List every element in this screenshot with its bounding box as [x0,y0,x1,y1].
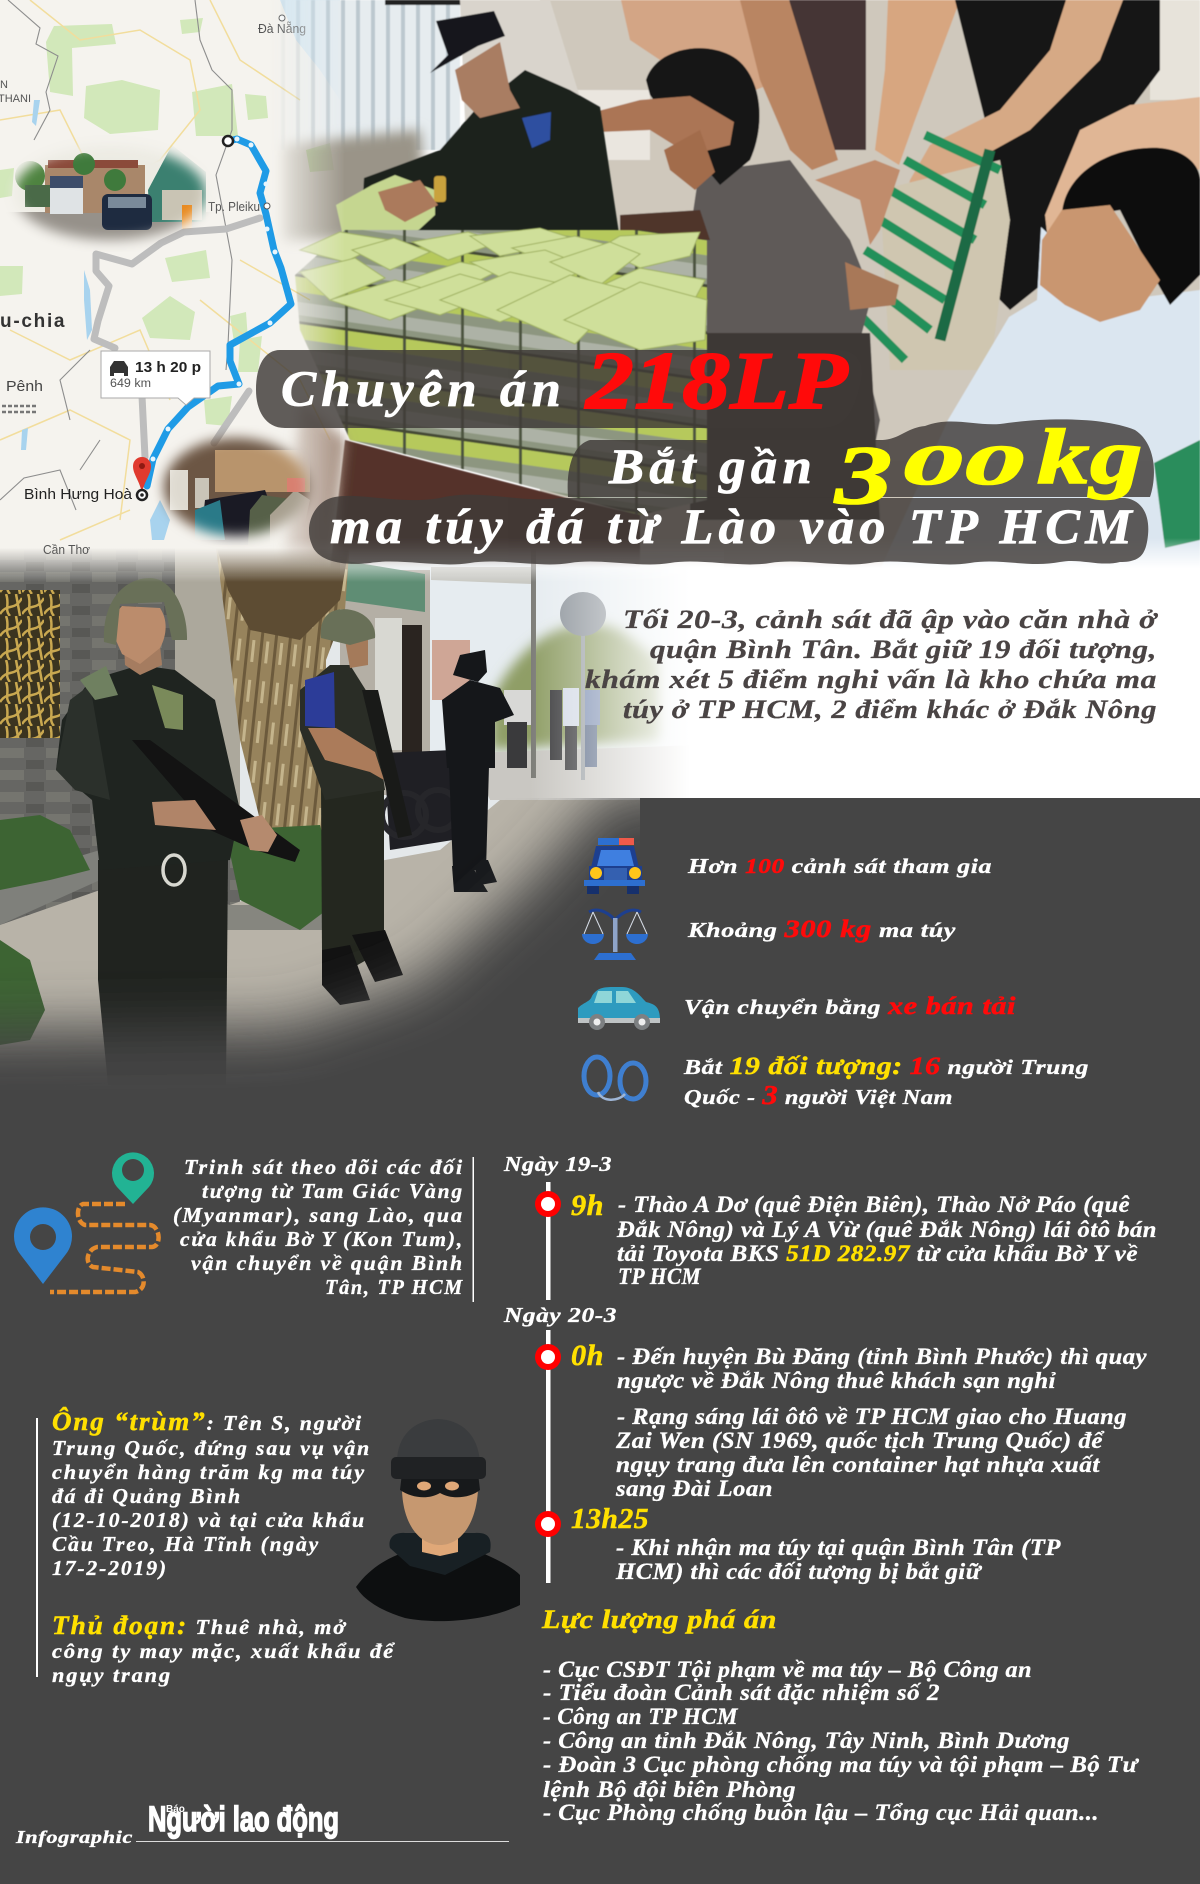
title: Bắt gần [608,438,817,494]
time: 0h: 0h [571,1339,604,1372]
intro text block [585,605,1159,724]
title: kg [1037,413,1143,500]
text: the ringleader and method: ngụy trang [52,1663,172,1687]
list: forces: lệnh Bộ đội biên Phòng [543,1777,796,1802]
text: surveillance route [173,1155,474,1302]
text: the ringleader and method: (12-10-2018) và tại cửa khẩu [52,1508,366,1532]
second officer [300,609,412,1005]
man in light-blue shirt [880,227,1200,570]
motorbike [384,750,453,850]
entry: 20-3 at 0h: - Đến huyện Bù Đăng (tỉnh Bình Phước) thì quay [617,1344,1147,1369]
officer in black on the phone [442,650,514,892]
entry: 20-3 at 0h: sang Đài Loan [615,1476,773,1501]
entry: 20-3 at 0h [615,1344,1147,1501]
stat: suspects [683,1053,1089,1110]
icon: car [578,987,660,1030]
heading: forces: Lực lượng phá án [541,1605,777,1634]
text: the ringleader and method: công ty may mặc, xuất khẩu để [52,1639,395,1663]
text: the ringleader and method: Trung Quốc, đứng sau vụ vận [52,1436,371,1460]
photo: arrest scene [540,0,1200,570]
entry: 20-3 at 13h25: HCM) thì các đối tượng bị bắt giữ [615,1559,983,1584]
route start marker [223,136,233,146]
blue main route [147,139,291,486]
text: the ringleader and method: Thủ đoạn: Thuê nhà, mở [52,1611,347,1640]
icon: masked ringleader [356,1419,520,1621]
title: 00 [902,435,1025,497]
entry: 20-3 at 13h25: - Khi nhận ma túy tại quận Bình Tân (TP [616,1535,1061,1560]
map labels: Bình Hưng Hoà [24,487,133,503]
list: forces [543,1657,1140,1825]
title: ma túy đá từ Lào vào TP HCM [330,498,1137,554]
list: forces: - Đoàn 3 Cục phòng chống ma túy và tội phạm – Bộ Tư [543,1752,1140,1777]
credit: infographic and newspaper logo [15,1800,509,1847]
stat: police officers: Hơn 100 cảnh sát tham gia [687,854,992,878]
title: Chuyên án [281,362,566,418]
marker: 0h [535,1344,561,1370]
street background [430,560,700,800]
photo inset: border gate with trucks [10,142,213,248]
credit: infographic and newspaper logo: Người lao động [148,1800,339,1839]
stat: vehicle: Vận chuyển bằng xe bán tải [684,993,1016,1020]
palm trunk [217,552,348,830]
date: 20-3: Ngày 20-3 [503,1303,617,1327]
text: surveillance route: tượng từ Tam Giác Vàng [202,1179,464,1203]
map labels: Tp. Pleiku [208,200,260,214]
text: surveillance route: (Myanmar), sang Lào, qua [173,1203,464,1227]
intro text block: quận Bình Tân. Bắt giữ 19 đối tượng, [650,635,1157,664]
sea on the right of the map [280,0,340,100]
list: forces: - Cục CSĐT Tội phạm về ma túy – Bộ Công an [543,1657,1032,1682]
stat: drug weight: Khoảng 300 kg ma túy [687,916,956,943]
plants [0,815,340,1045]
timeline [503,1152,1157,1584]
list: forces: - Công an tỉnh Đắk Nông, Tây Ninh, Bình Dương [543,1728,1070,1753]
text: the ringleader and method: Ông “trùm” : Tên S, người [52,1407,363,1436]
text: surveillance route: Tân, TP HCM [325,1275,464,1299]
map labels [0,15,306,557]
text: the ringleader and method: 17-2-2019) [52,1556,168,1580]
photo: police officer [270,0,620,250]
text: the ringleader and method: đá đi Quảng Bình [52,1484,242,1508]
entry: 19-3 at 9h: TP HCM [618,1264,702,1289]
map labels: u-chia [0,311,65,332]
icon: police car [584,838,645,894]
top photo collage: arrest, police officer and drug bales [270,0,1200,570]
time: 13h25: 13h25 [571,1504,649,1535]
travel time callout [101,351,210,405]
entry: 19-3 at 9h: Đắk Nông) và Lý A Vừ (quê Đắk Nông) lái ôtô bán [616,1217,1157,1242]
alternative grey routes [94,218,260,457]
title: 218LP [585,335,848,426]
marker: 13h25 [535,1511,561,1537]
credit: infographic and newspaper logo: Infographic [15,1827,133,1847]
text: the ringleader and method: Cầu Treo, Hà Tĩnh (ngày [52,1532,320,1556]
credit: infographic and newspaper logo: Báo [166,1804,185,1815]
stat: suspects: Bắt 19 đối tượng: 16 người Trung [683,1053,1089,1080]
entry: 19-3 at 9h: - Thào A Dơ (quê Điện Biên), Thào Nở Páo (quê [618,1192,1130,1217]
list: forces: - Tiểu đoàn Cảnh sát đặc nhiệm số 2 [543,1680,940,1705]
house and wall [0,540,240,940]
entry: 19-3 at 9h: tải Toyota BKS 51D 282.97 từ cửa khẩu Bờ Y về [617,1241,1138,1266]
entry: 19-3 at 9h [616,1192,1157,1289]
list: forces: - Công an TP HCM [543,1704,739,1729]
intro text block: khám xét 5 điểm nghi vấn là kho chứa ma [585,665,1157,694]
map: route from Bờ Y to Bình Hưng Hoà [0,0,340,575]
entry: 20-3 at 0h: Zai Wen (SN 1969, quốc tịch Trung Quốc) để [615,1428,1104,1453]
intro text block: Tối 20-3, cảnh sát đã ập vào căn nhà ở [623,605,1159,634]
entry: 20-3 at 0h: ngụy trang đưa lên container hạt nhựa xuất [616,1452,1100,1477]
travel time callout: 13 h 20 p [135,359,201,376]
photo inset: warehouse search [154,428,316,546]
map labels: Đà Nẵng [258,21,306,36]
dark background section [0,790,1200,1884]
icon: route pins [14,1152,159,1292]
entry: 20-3 at 0h: ngược về Đắk Nông thuê khách sạn nghỉ [617,1368,1056,1393]
map labels: N [0,79,8,91]
travel time callout: 649 km [110,378,151,390]
date: 19-3: Ngày 19-3 [503,1152,612,1176]
stat: suspects: Quốc - 3 người Việt Nam [684,1080,953,1110]
map pin [133,457,151,500]
text: surveillance route: cửa khẩu Bờ Y (Kon Tum), [180,1227,464,1251]
time: 9h: 9h [571,1189,604,1222]
map labels: Pênh [6,378,43,395]
fade into white behind the intro text [539,562,694,800]
photo: stacks of drug bales [280,228,707,570]
photo: riot police standing guard [0,550,668,1074]
first officer with rifle [56,578,300,1085]
text: the ringleader and method: chuyển hàng trăm kg ma túy [52,1460,366,1484]
text: surveillance route: Trinh sát theo dõi các đối [184,1155,464,1179]
map labels: Cần Thơ [43,543,90,557]
icon: handcuffs [584,1057,646,1100]
entry: 20-3 at 13h25 [615,1535,1061,1584]
text: the ringleader and method [36,1407,395,1687]
marker: 9h [535,1191,561,1217]
intro text block: túy ở TP HCM, 2 điểm khác ở Đắk Nông [623,695,1157,724]
list: forces: - Cục Phòng chống buôn lậu – Tổng cục Hải quan... [543,1800,1099,1825]
text: surveillance route: vận chuyển về quận Bình [191,1251,464,1275]
icon: scales [582,910,648,960]
title banner backgrounds [256,350,1154,564]
title [281,335,1143,554]
pavement [0,800,640,1060]
entry: 20-3 at 0h: - Rạng sáng lái ôtô về TP HCM giao cho Huang [617,1404,1127,1429]
title: 3 [834,429,893,522]
